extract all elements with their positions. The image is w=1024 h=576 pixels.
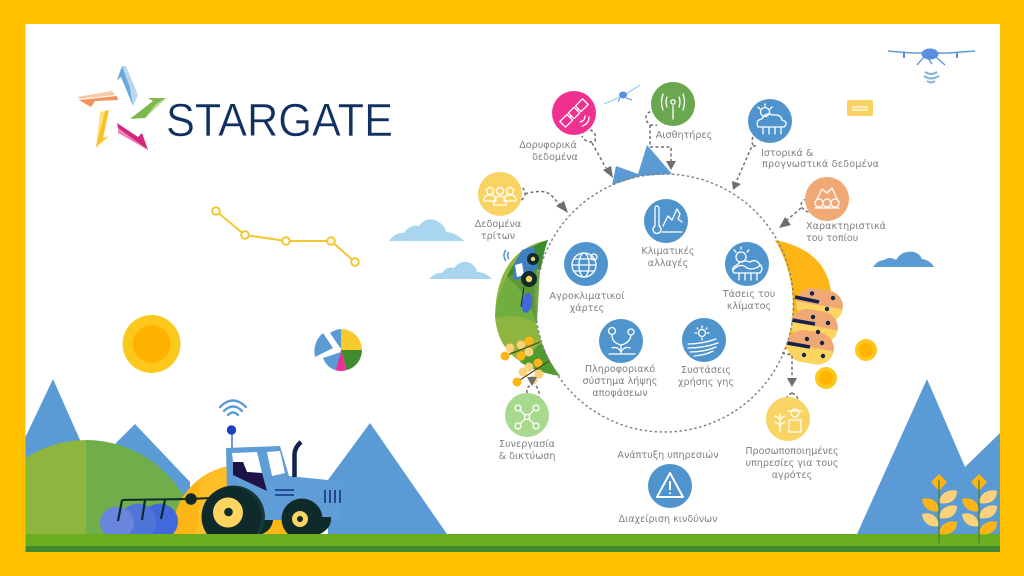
ground (26, 534, 1000, 552)
label: agro-climatic maps: χάρτες (570, 302, 604, 314)
small peaks on circle (612, 145, 672, 185)
yellow dots (815, 339, 877, 389)
big drone (888, 48, 975, 82)
label: collaboration: & δικτύωση (499, 450, 555, 462)
label: agro-climatic maps: Αγροκλιματικοί (550, 290, 625, 302)
label: landscape (806, 220, 886, 244)
label: sensors: Αισθητήρες (656, 129, 712, 141)
arrow: landscape to circle (779, 199, 812, 228)
icon: historical data (748, 99, 792, 143)
label: collaboration (499, 438, 555, 462)
rear wheel (202, 485, 265, 534)
label: satellite data: δεδομένα (532, 151, 578, 163)
label: climate change: Κλιματικές (641, 245, 695, 257)
label: land use: χρήσης γης (678, 376, 734, 388)
fenders (250, 520, 273, 534)
label: service development: Ανάπτυξη υπηρεσιών (617, 449, 719, 461)
label: climate change (641, 245, 695, 269)
label: decision support system: αποφάσεων (592, 387, 648, 399)
icon: third party data (478, 172, 522, 216)
mini tractor (513, 246, 539, 314)
wheat plant 1 (922, 474, 957, 543)
logo wordmark: STARGATE (166, 94, 393, 146)
icon: personalised services (766, 397, 810, 441)
label: risk management: Διαχείριση κινδύνων (618, 513, 718, 525)
spotted pills (785, 285, 845, 367)
front wheel (282, 499, 323, 534)
mountains left (26, 379, 447, 534)
arrow: third party to circle (515, 187, 568, 213)
logo: STARGATE (77, 66, 393, 150)
icon: landscape (805, 177, 849, 221)
label: historical data: Ιστορικά & (761, 147, 814, 159)
plough (118, 493, 210, 521)
label: personalised services (745, 445, 839, 481)
label: satellite data: Δορυφορικά (519, 139, 577, 151)
wheat (922, 474, 997, 543)
label: land use: Συστάσεις (681, 364, 731, 376)
dotted circle (536, 174, 794, 432)
label: landscape: Χαρακτηριστικά (806, 220, 886, 232)
label: personalised services: αγρότες (772, 469, 812, 481)
tractor body (226, 446, 342, 520)
icon: sensors (651, 82, 695, 126)
label: personalised services: Προσωποποιημένες (745, 445, 839, 457)
label: decision support system (583, 363, 657, 399)
exhaust (294, 442, 301, 477)
green crescent (495, 240, 560, 386)
label: land use (678, 364, 734, 388)
icon: climate change (644, 199, 688, 243)
label: personalised services: υπηρεσίες για τους (745, 457, 839, 469)
label: historical data (761, 147, 879, 170)
wifi icon (220, 400, 246, 415)
logo star (77, 66, 166, 150)
label: climate trends: Τάσεις του (722, 288, 775, 300)
icon: risk management (648, 464, 692, 508)
message icon (847, 100, 873, 116)
line chart decoration (212, 207, 359, 266)
hills (26, 440, 310, 534)
wheat plant 2 (962, 474, 997, 543)
tractor windows (232, 452, 262, 473)
arrow: crescent to collaboration (527, 377, 539, 405)
arrow: satellite to circle (582, 130, 613, 178)
label: historical data: προγνωστικά δεδομένα (762, 158, 879, 170)
sun (122, 315, 180, 373)
label: landscape: του τοπίου (806, 232, 858, 244)
label: collaboration: Συνεργασία (499, 438, 555, 450)
icon: agro-climatic maps (564, 242, 608, 286)
label: decision support system: σύστημα λήψης (583, 375, 657, 387)
clouds (389, 219, 934, 279)
label: climate trends: κλίματος (727, 300, 771, 312)
label: third party data: τρίτων (481, 230, 515, 242)
label: agro-climatic maps (550, 290, 625, 314)
icon: decision support system (599, 319, 643, 363)
mountains right (857, 379, 1000, 534)
arrow: historical data to circle (732, 137, 756, 190)
orange crescent (775, 240, 845, 367)
arrow: circle to personalised services (782, 353, 798, 403)
label: climate change: αλλαγές (648, 257, 688, 269)
label: climate trends (722, 288, 775, 312)
wheat on crescent (500, 336, 549, 386)
bales (100, 504, 178, 534)
icon: land use (682, 318, 726, 362)
label: third party data (475, 218, 521, 242)
label: decision support system: Πληροφοριακό (585, 363, 655, 375)
antenna (227, 425, 236, 449)
small drone (604, 85, 640, 104)
icon: collaboration (505, 393, 549, 437)
vents (275, 490, 340, 503)
pie chart (314, 329, 362, 371)
arrow: sensors to circle (646, 112, 676, 170)
mini wifi (504, 250, 509, 261)
icon: satellite data (552, 91, 596, 135)
tractor (118, 400, 342, 534)
icon: climate trends (725, 242, 769, 286)
label: satellite data (519, 139, 578, 163)
label: third party data: Δεδομένα (475, 218, 521, 230)
